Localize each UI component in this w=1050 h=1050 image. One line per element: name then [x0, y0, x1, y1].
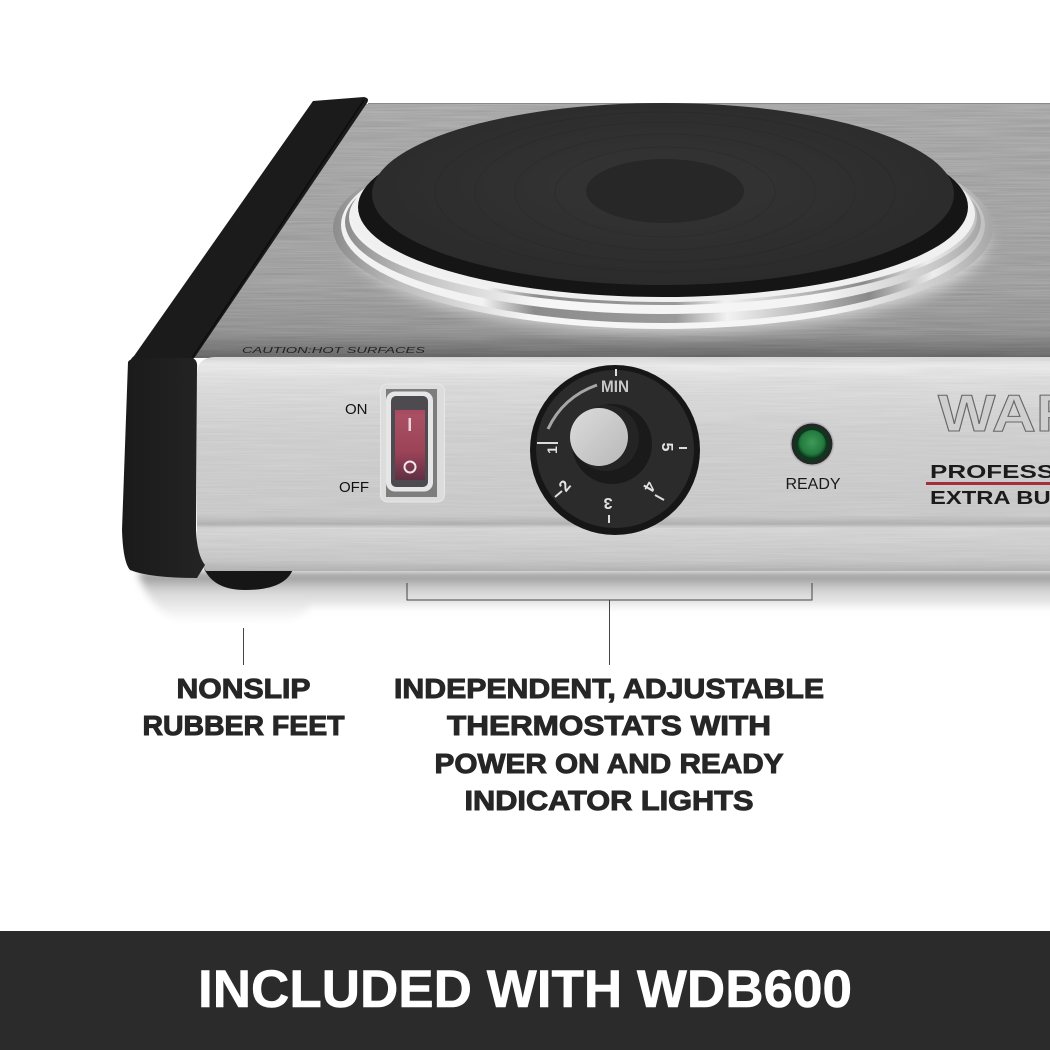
stainless top surface — [190, 104, 1050, 358]
stainless front panel — [197, 357, 1050, 571]
on/off labels: OFF — [339, 479, 369, 496]
callout: thermostats and indicator lights: THERMOSTATS WITH — [447, 710, 771, 741]
dial numbers: 2 — [556, 477, 575, 495]
hot plate burner — [333, 103, 993, 332]
dial ticks — [537, 369, 687, 523]
callout: nonslip rubber feet — [142, 673, 344, 741]
on/off labels: ON — [345, 401, 368, 418]
callout: nonslip rubber feet: RUBBER FEET — [142, 710, 344, 741]
footer banner — [0, 931, 1050, 1050]
bracket: thermostat controls — [407, 583, 812, 665]
callout: thermostats and indicator lights: POWER ON AND READY — [434, 748, 784, 779]
thermostat dial — [530, 365, 700, 535]
on/off labels — [339, 401, 369, 496]
ready indicator light — [785, 422, 841, 493]
model description — [926, 462, 1050, 508]
cast shadow under unit — [138, 572, 1050, 624]
dial numbers: 4 — [639, 478, 658, 494]
leader line: rubber feet — [242, 628, 244, 665]
dial numbers: 3 — [603, 494, 612, 511]
power rocker switch — [380, 384, 444, 502]
dial numbers: 5 — [658, 443, 675, 452]
dial numbers: MIN — [601, 377, 629, 396]
ready indicator light: READY — [785, 476, 841, 493]
callout: thermostats and indicator lights: INDICATOR LIGHTS — [464, 785, 754, 816]
banner heading: INCLUDED WITH WDB600 — [198, 960, 852, 1019]
dial numbers: 1 — [544, 446, 560, 454]
caution text: CAUTION:HOT SURFACES — [242, 345, 426, 355]
callout: thermostats and indicator lights — [394, 673, 824, 816]
dial scale arc — [548, 385, 597, 429]
callout: nonslip rubber feet: NONSLIP — [176, 673, 310, 704]
callout: thermostats and indicator lights: INDEPENDENT, ADJUSTABLE — [394, 673, 824, 704]
product photo: double burner cooktop — [122, 97, 1050, 624]
black side trim — [122, 97, 368, 578]
rubber foot — [203, 566, 294, 590]
dial numbers — [544, 377, 675, 511]
